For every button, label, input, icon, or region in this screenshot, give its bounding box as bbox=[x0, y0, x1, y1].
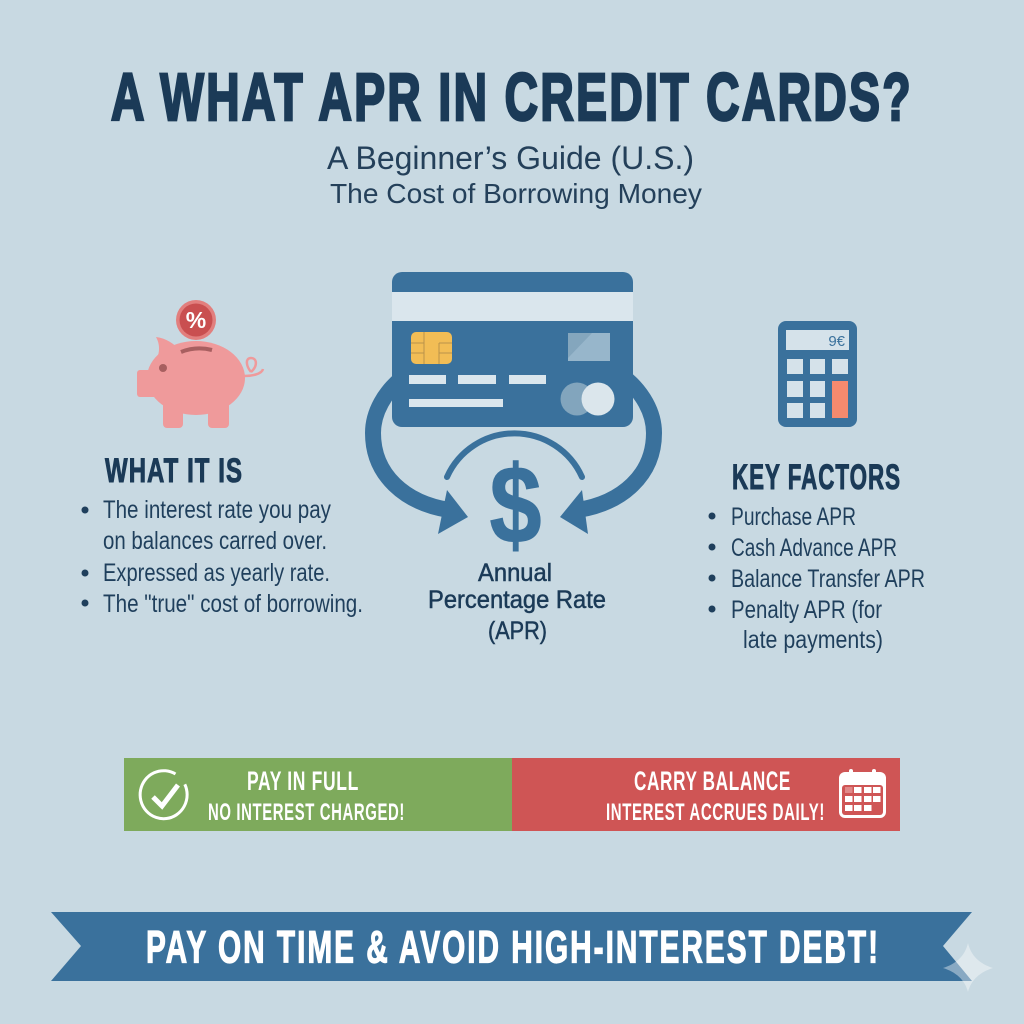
label: annual percentage rate bbox=[428, 559, 606, 645]
credit card bbox=[392, 272, 633, 427]
list: what it is: Expressed as yearly rate. bbox=[103, 559, 330, 587]
icon: calculator: 9€ bbox=[828, 333, 846, 350]
panel: what it is bbox=[82, 452, 363, 618]
dollar sign: $ bbox=[489, 444, 542, 567]
subtitle bbox=[327, 140, 702, 209]
list: key factors: Penalty APR (for bbox=[731, 596, 882, 624]
text: carry balance: CARRY BALANCE bbox=[634, 766, 791, 796]
arc bbox=[447, 433, 582, 477]
list: what it is: on balances carred over. bbox=[103, 527, 327, 555]
list: key factors: Cash Advance APR bbox=[731, 534, 897, 562]
subtitle: A Beginner’s Guide (U.S.) bbox=[327, 140, 694, 176]
list: key factors: late payments) bbox=[743, 626, 883, 654]
percent coin: % bbox=[186, 307, 206, 333]
left arrow bbox=[373, 378, 468, 534]
list: what it is: The interest rate you pay bbox=[103, 496, 331, 524]
list: key factors: Purchase APR bbox=[731, 503, 856, 531]
heading: key factors: KEY FACTORS bbox=[732, 458, 901, 497]
text: pay in full: NO INTEREST CHARGED! bbox=[208, 799, 405, 826]
text: carry balance: INTEREST ACCRUES DAILY! bbox=[606, 799, 825, 826]
heading: what it is: WHAT IT IS bbox=[105, 452, 243, 490]
pig body bbox=[137, 337, 245, 428]
subtitle: The Cost of Borrowing Money bbox=[330, 178, 702, 209]
icon: sparkle bbox=[943, 943, 993, 992]
panel: key factors bbox=[708, 458, 925, 654]
chip bbox=[411, 332, 452, 364]
icon: piggy bank with percent coin bbox=[137, 300, 263, 428]
list: what it is: The "true" cost of borrowing. bbox=[103, 590, 363, 618]
panel: carry balance bbox=[512, 758, 900, 831]
icon: calendar bbox=[839, 769, 886, 818]
label: annual percentage rate: Percentage Rate bbox=[428, 586, 606, 614]
right arrow bbox=[560, 378, 654, 534]
list: key factors: Balance Transfer APR bbox=[731, 565, 925, 593]
text: pay in full: PAY IN FULL bbox=[247, 766, 359, 796]
hologram bbox=[568, 333, 610, 361]
icon: calculator bbox=[778, 321, 857, 427]
label: annual percentage rate: Annual bbox=[478, 559, 552, 587]
icon: check circle bbox=[140, 771, 187, 819]
panel: pay in full bbox=[124, 758, 512, 831]
text: carry balance bbox=[606, 766, 825, 826]
icon: credit card with arrows and dollar bbox=[373, 272, 654, 567]
list: key factors bbox=[708, 503, 925, 654]
list: what it is bbox=[82, 496, 363, 618]
text: pay in full bbox=[208, 766, 405, 826]
label: annual percentage rate: (APR) bbox=[488, 617, 547, 645]
banner bbox=[51, 912, 972, 981]
